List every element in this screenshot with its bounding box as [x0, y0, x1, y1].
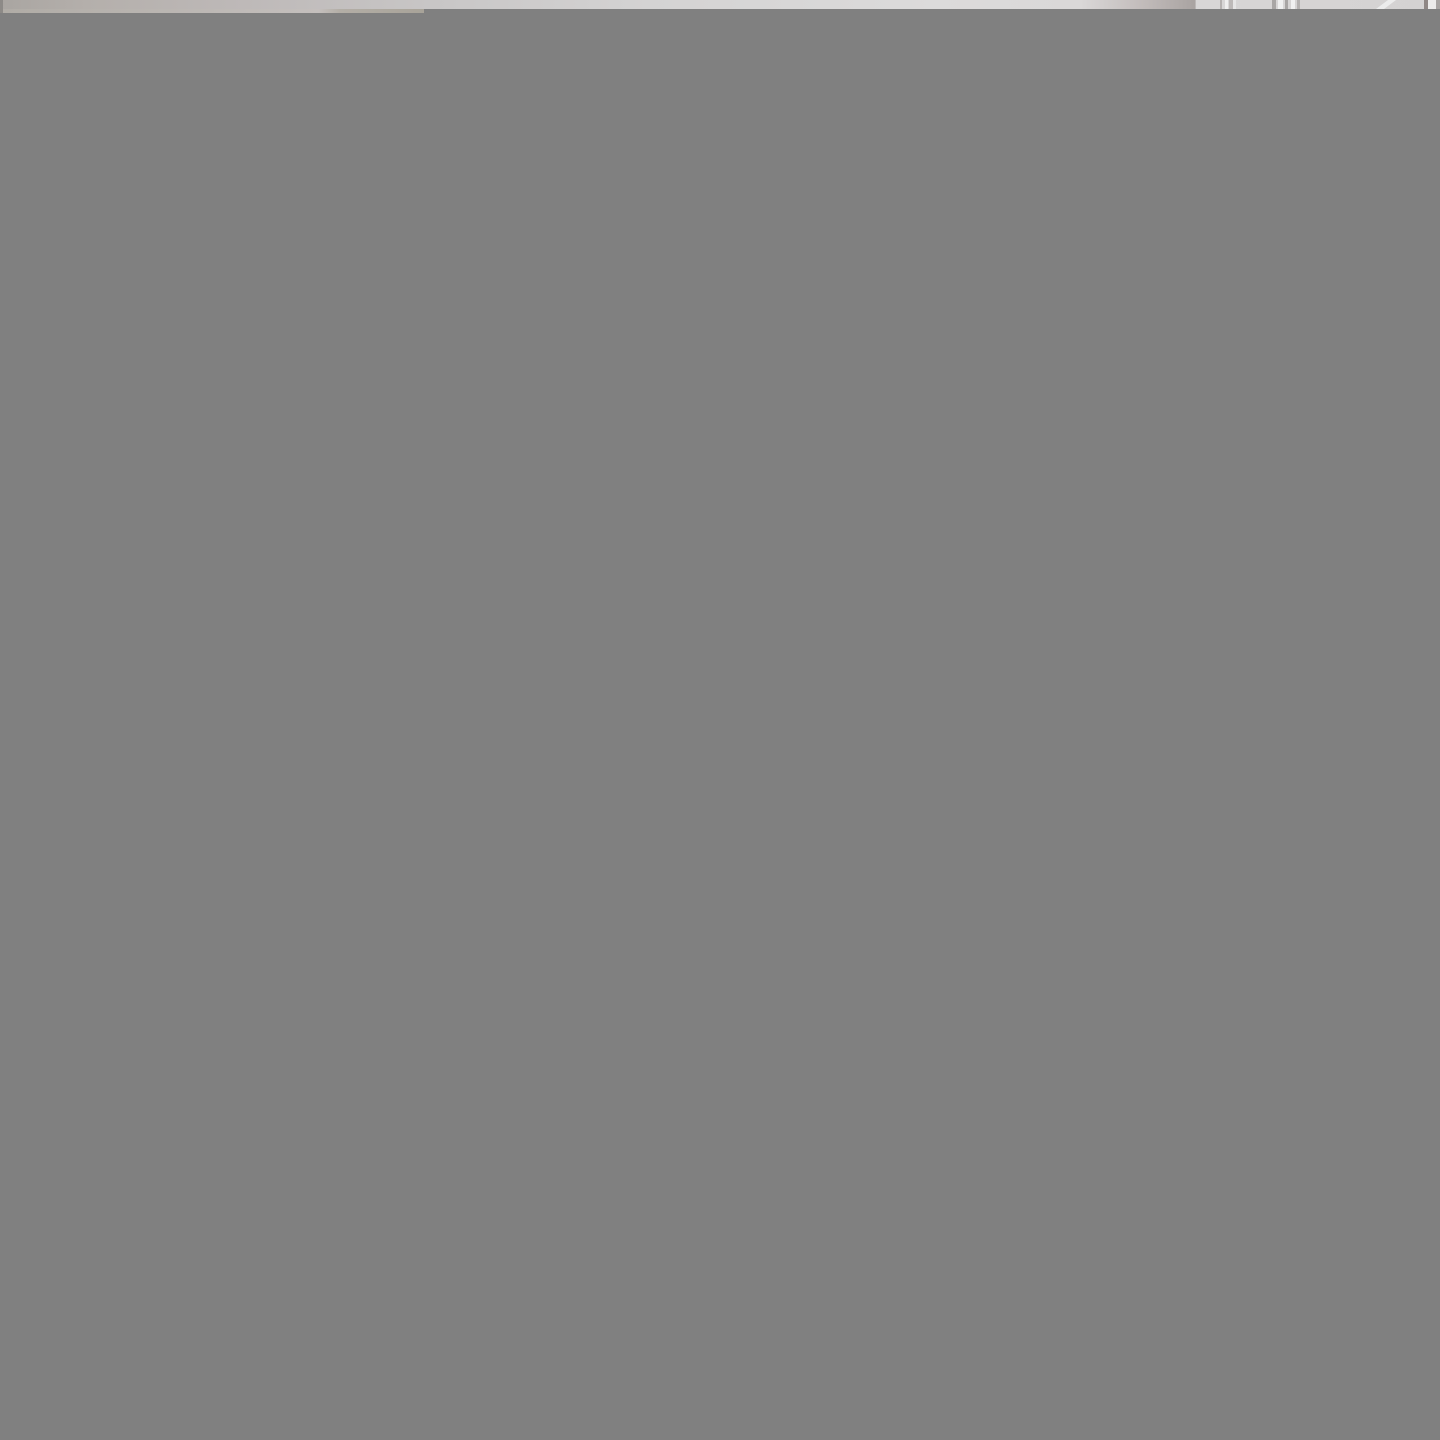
top photographic strip — [0, 0, 1440, 13]
